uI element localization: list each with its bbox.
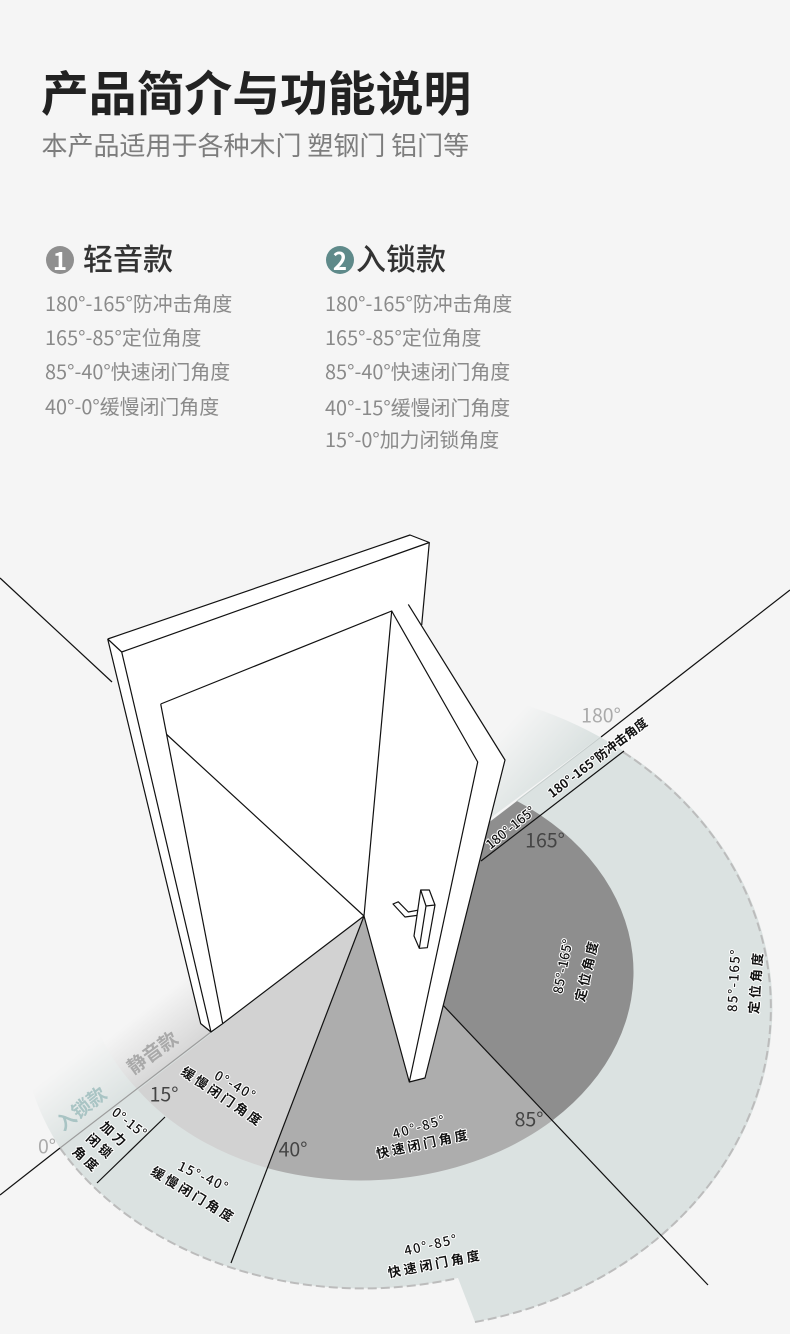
label: inner fast closing range: 40°-85° <box>390 1109 448 1143</box>
icon: number 1 badge <box>46 246 74 274</box>
door leaf <box>364 604 505 1082</box>
band label: latch model: 入锁款 <box>50 1080 112 1136</box>
label: inner fast closing name: 快速闭门角度 <box>374 1124 472 1162</box>
title: 产品简介与功能说明 <box>41 56 471 125</box>
angle line: 40 degrees <box>231 916 364 1263</box>
text: model 1 angle 2: 165°-85°定位角度 <box>45 322 201 351</box>
text: model 1 angle 3: 85°-40°快速闭门角度 <box>45 356 230 385</box>
icon: door frame and door <box>108 535 505 1082</box>
text: model 2 angle 4: 40°-15°缓慢闭门角度 <box>325 392 510 421</box>
text: model 1 angle 4: 40°-0°缓慢闭门角度 <box>45 391 219 420</box>
heading: model 2: 入锁款 <box>356 235 446 279</box>
angle mark 85: 85° <box>515 1104 543 1132</box>
heading: model 1: 轻音款 <box>83 235 173 279</box>
faded teal band beyond the 0 degree line <box>21 990 138 1148</box>
icon: number 2 badge: 2 <box>333 242 347 277</box>
label: outer slow closing name: 缓慢闭门角度 <box>148 1161 240 1227</box>
outer ring dashed edge, lower left <box>60 1148 458 1288</box>
inner sector: slow closing <box>138 916 364 1168</box>
outer ring dashed edge, right <box>475 752 771 1322</box>
faded area above the 180 degree line <box>485 698 600 822</box>
label: outer positioning range: 85°-165° <box>722 948 744 1012</box>
door handle <box>393 890 435 948</box>
subtitle: 本产品适用于各种木门 塑钢门 铝门等 <box>42 126 469 163</box>
angle mark 165: 165° <box>525 824 565 854</box>
angle line: 165 degrees <box>481 751 624 861</box>
inner sector: positioning and anti-impact <box>420 801 634 1120</box>
angle line: 0 degrees <box>0 1032 211 1195</box>
angle mark 40: 40° <box>279 1134 307 1162</box>
angle line: 85 degrees <box>440 1002 708 1285</box>
faded grey wedge beyond the 15 degree edge <box>95 960 222 1090</box>
frame outlines <box>108 535 429 1032</box>
door frame <box>108 535 429 1032</box>
label: outer slow closing range: 15°-40° <box>175 1156 233 1196</box>
text: model 2 angle 2: 165°-85°定位角度 <box>325 322 481 351</box>
angle mark 0: 0° <box>38 1130 56 1160</box>
angle line: top left <box>0 578 112 682</box>
text: model 2 angle 5: 15°-0°加力闭锁角度 <box>325 424 499 453</box>
inner sector: fast closing <box>267 916 553 1180</box>
band label: silent model: 静音款 <box>121 1024 183 1080</box>
icon: number 2 badge <box>326 246 354 274</box>
label: latching range: 0°-15° <box>108 1102 152 1142</box>
text: model 1 angle 1: 180°-165°防冲击角度 <box>45 288 232 317</box>
angle mark 15: 15° <box>150 1078 178 1108</box>
label: latching line 1: 加力 <box>97 1116 133 1152</box>
label: outer fast closing range: 40°-85° <box>402 1229 460 1259</box>
label: outer positioning name: 定位角度 <box>743 949 767 1015</box>
text: model 2 angle 3: 85°-40°快速闭门角度 <box>325 356 510 385</box>
label: inner anti-impact angle: 180°-165° <box>481 801 539 853</box>
label: outer anti-impact angle: 180°-165°防冲击角度 <box>543 712 651 802</box>
label: inner positioning range: 85°-165° <box>547 937 577 995</box>
label: inner slow closing range: 0°-40° <box>211 1065 261 1105</box>
label: latching line 3: 角度 <box>69 1141 105 1177</box>
door opening outlines <box>161 611 392 1024</box>
angle mark 180: 180° <box>581 700 621 728</box>
door leaf outlines <box>364 604 505 1082</box>
label: inner slow closing name: 缓慢闭门角度 <box>178 1061 268 1131</box>
panel: model 1 <box>45 235 232 420</box>
text: model 2 angle 1: 180°-165°防冲击角度 <box>325 288 512 317</box>
label: inner positioning name: 定位角度 <box>570 937 602 1003</box>
panel: model 2 <box>325 235 512 453</box>
label: outer fast closing name: 快速闭门角度 <box>386 1245 484 1281</box>
outer ring: latch model sectors <box>60 737 772 1322</box>
label: latching line 2: 闭锁 <box>83 1128 119 1164</box>
icon: number 1 badge: 1 <box>53 242 67 277</box>
angle line: 180 degrees <box>517 590 790 801</box>
angle line: 15 degrees <box>97 1117 165 1183</box>
